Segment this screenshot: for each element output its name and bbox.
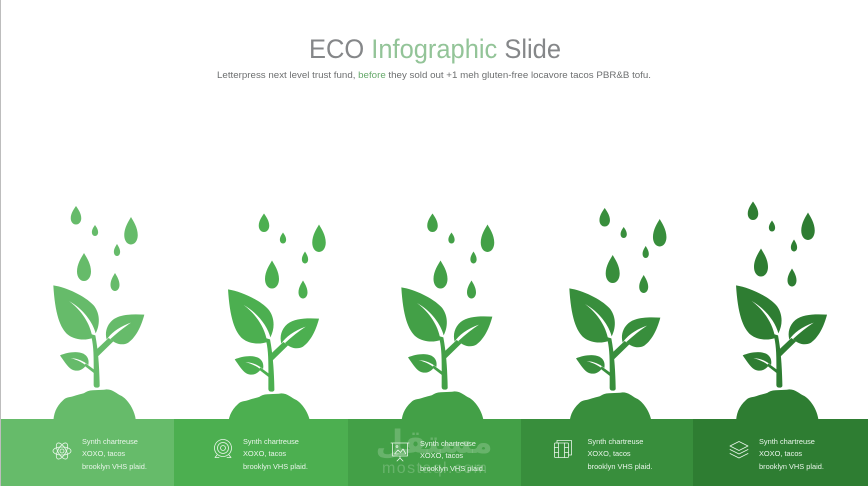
plant 2 with raindrops	[228, 214, 326, 427]
text block: brooklyn VHS plaid.	[759, 462, 824, 471]
icon: target	[214, 440, 232, 458]
text block: Synth chartreuse	[243, 437, 299, 446]
text block: brooklyn VHS plaid.	[82, 462, 147, 471]
text block: Synth chartreuse	[759, 437, 815, 446]
left page edge	[0, 0, 1, 486]
plant 5 with raindrops	[736, 202, 827, 423]
icon: film strip	[554, 440, 572, 458]
text block: Synth chartreuse	[420, 439, 476, 448]
subtitle: Letterpress next level trust fund, before they sold out +1 meh gluten-free locavore tacos PBR&B tofu.	[217, 70, 651, 81]
text block: XOXO, tacos	[588, 449, 631, 458]
watermark: mostaql.com	[382, 460, 487, 477]
text block: XOXO, tacos	[243, 449, 286, 458]
text block: brooklyn VHS plaid.	[420, 464, 485, 473]
icon: stacked layers	[730, 442, 748, 458]
panel: step 1	[1, 419, 174, 486]
text block: brooklyn VHS plaid.	[588, 462, 652, 471]
panel: step 3	[348, 419, 521, 486]
plant 4 with raindrops	[569, 208, 666, 426]
text block: brooklyn VHS plaid.	[243, 462, 308, 471]
plant 3 with raindrops	[401, 214, 494, 425]
title: ECO Infographic Slide	[309, 34, 561, 64]
panel: step 2	[174, 419, 348, 486]
text block: Synth chartreuse	[82, 437, 138, 446]
text block: XOXO, tacos	[420, 451, 463, 460]
icon: presentation board	[391, 443, 409, 461]
plant 1 with raindrops	[53, 206, 144, 423]
panel: step 5	[693, 419, 868, 486]
text block: XOXO, tacos	[759, 449, 802, 458]
panel: step 4	[521, 419, 693, 486]
watermark: مستقل	[375, 423, 493, 461]
text block: Synth chartreuse	[588, 437, 643, 446]
icon: atom	[53, 441, 71, 461]
text block: XOXO, tacos	[82, 449, 125, 458]
